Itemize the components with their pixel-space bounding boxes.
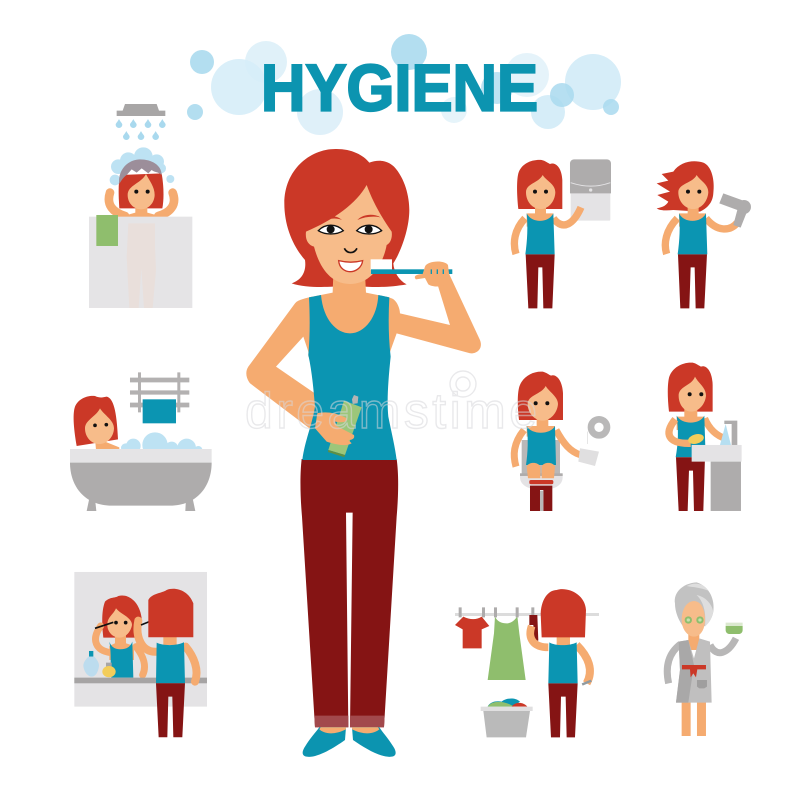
lotion bottle xyxy=(89,651,93,657)
cucumber slices xyxy=(685,616,692,624)
dress xyxy=(488,616,526,680)
eyes xyxy=(318,225,382,234)
trousers xyxy=(676,457,705,511)
water xyxy=(720,424,731,445)
toothpaste tube xyxy=(328,401,362,455)
brushing hand xyxy=(415,261,450,287)
tank xyxy=(676,416,706,457)
thighs xyxy=(527,463,555,478)
nose xyxy=(344,248,357,253)
hair xyxy=(284,149,409,287)
paper sheet xyxy=(578,448,599,466)
clothes line xyxy=(455,613,599,616)
scene: sink xyxy=(668,363,742,511)
shelf xyxy=(74,678,207,683)
tub feet xyxy=(87,498,195,511)
peg in hand xyxy=(582,680,592,686)
faucet xyxy=(724,421,737,445)
face xyxy=(682,601,705,637)
foam xyxy=(121,432,202,458)
eyebrows xyxy=(322,215,381,222)
reflection face xyxy=(107,608,132,638)
arms xyxy=(109,193,174,216)
reflection tank top xyxy=(109,642,133,678)
neck xyxy=(527,418,555,437)
basin xyxy=(692,445,742,462)
perfume bottle xyxy=(106,663,112,667)
face xyxy=(85,408,114,444)
reflection arms xyxy=(96,626,144,675)
face xyxy=(528,386,558,421)
trousers xyxy=(548,683,578,737)
main woman: trousers xyxy=(300,459,398,757)
arms xyxy=(514,207,581,254)
arm raised xyxy=(137,621,157,652)
hair xyxy=(668,363,713,412)
trousers xyxy=(156,683,185,737)
scene: hand dryer xyxy=(514,159,611,308)
tub body xyxy=(70,463,212,506)
water drops xyxy=(116,119,166,140)
title: HYGIENE xyxy=(261,50,538,124)
tank xyxy=(526,426,556,465)
neck xyxy=(163,635,177,645)
pocket xyxy=(697,680,707,688)
other arm xyxy=(577,645,590,683)
shower head xyxy=(117,104,165,116)
neck xyxy=(679,207,706,227)
hair xyxy=(517,160,562,209)
neck and shoulder xyxy=(95,442,119,450)
robe xyxy=(676,638,712,703)
scene: laundry xyxy=(455,589,599,737)
silhouette behind screen xyxy=(127,223,156,308)
face xyxy=(679,377,706,412)
neck xyxy=(527,207,553,227)
tub rim xyxy=(70,449,212,463)
mouth xyxy=(339,261,363,272)
face xyxy=(678,175,708,209)
toothbrush xyxy=(371,259,392,270)
bubbles behind title xyxy=(187,34,621,135)
arms back xyxy=(705,418,726,439)
paper xyxy=(571,192,610,221)
tank top xyxy=(156,642,185,683)
scene: toilet xyxy=(514,372,607,511)
other arm xyxy=(186,647,197,682)
arm front xyxy=(669,419,691,443)
cup xyxy=(726,623,743,626)
dispenser xyxy=(570,159,611,193)
main woman: upper body xyxy=(246,149,481,460)
neck xyxy=(557,635,570,647)
hair back view xyxy=(541,589,586,637)
red underwear xyxy=(529,480,553,484)
neck xyxy=(677,408,704,430)
mascara wand xyxy=(95,622,113,628)
neck and shoulders xyxy=(126,205,157,218)
hair back view xyxy=(148,589,193,637)
left arm xyxy=(246,297,340,435)
hair xyxy=(518,372,563,420)
belt xyxy=(682,665,706,677)
scene: hair dryer xyxy=(657,161,751,308)
towel turban xyxy=(675,582,714,627)
scene: bathtub xyxy=(70,372,212,511)
main woman brushing teeth xyxy=(246,149,481,757)
trousers xyxy=(526,254,555,308)
toilet xyxy=(522,440,560,475)
foam on hair xyxy=(119,159,162,184)
tank xyxy=(678,213,707,254)
scene: shower xyxy=(89,104,192,308)
face xyxy=(306,185,392,284)
tank xyxy=(548,642,578,683)
garment in hand xyxy=(529,615,538,641)
reflection neck xyxy=(109,635,134,660)
hair blown xyxy=(657,161,714,212)
right arm xyxy=(387,270,481,357)
mirror xyxy=(74,572,207,707)
neck and chest xyxy=(308,273,389,357)
scene: face mask and robe xyxy=(667,582,743,736)
towel rail xyxy=(130,372,189,412)
shower screen xyxy=(89,217,192,308)
tank xyxy=(525,213,555,254)
teal towel xyxy=(143,399,176,423)
arms xyxy=(665,218,737,254)
trousers down xyxy=(530,486,552,511)
toilet roll xyxy=(591,419,607,435)
cabinet xyxy=(711,462,741,511)
face xyxy=(526,175,555,209)
trousers xyxy=(678,254,707,308)
shampoo foam xyxy=(110,147,174,185)
towel xyxy=(96,215,118,246)
hair xyxy=(119,173,164,208)
raised arm xyxy=(530,626,548,647)
scene: mirror and make-up xyxy=(74,572,207,737)
tank top xyxy=(302,295,397,460)
face xyxy=(128,174,155,209)
legs xyxy=(682,702,706,736)
neck xyxy=(688,633,699,650)
t-shirt xyxy=(455,617,489,648)
hair xyxy=(74,396,118,446)
dryer xyxy=(719,193,748,228)
robe arms xyxy=(667,638,736,683)
watermark: dreamstime xyxy=(245,383,537,439)
washing in basket xyxy=(488,698,520,707)
sponge xyxy=(687,432,705,446)
hand holding tube xyxy=(315,412,354,445)
reflection hair xyxy=(102,596,142,638)
arms xyxy=(514,430,581,467)
pegs xyxy=(459,607,534,617)
basket xyxy=(481,707,533,711)
